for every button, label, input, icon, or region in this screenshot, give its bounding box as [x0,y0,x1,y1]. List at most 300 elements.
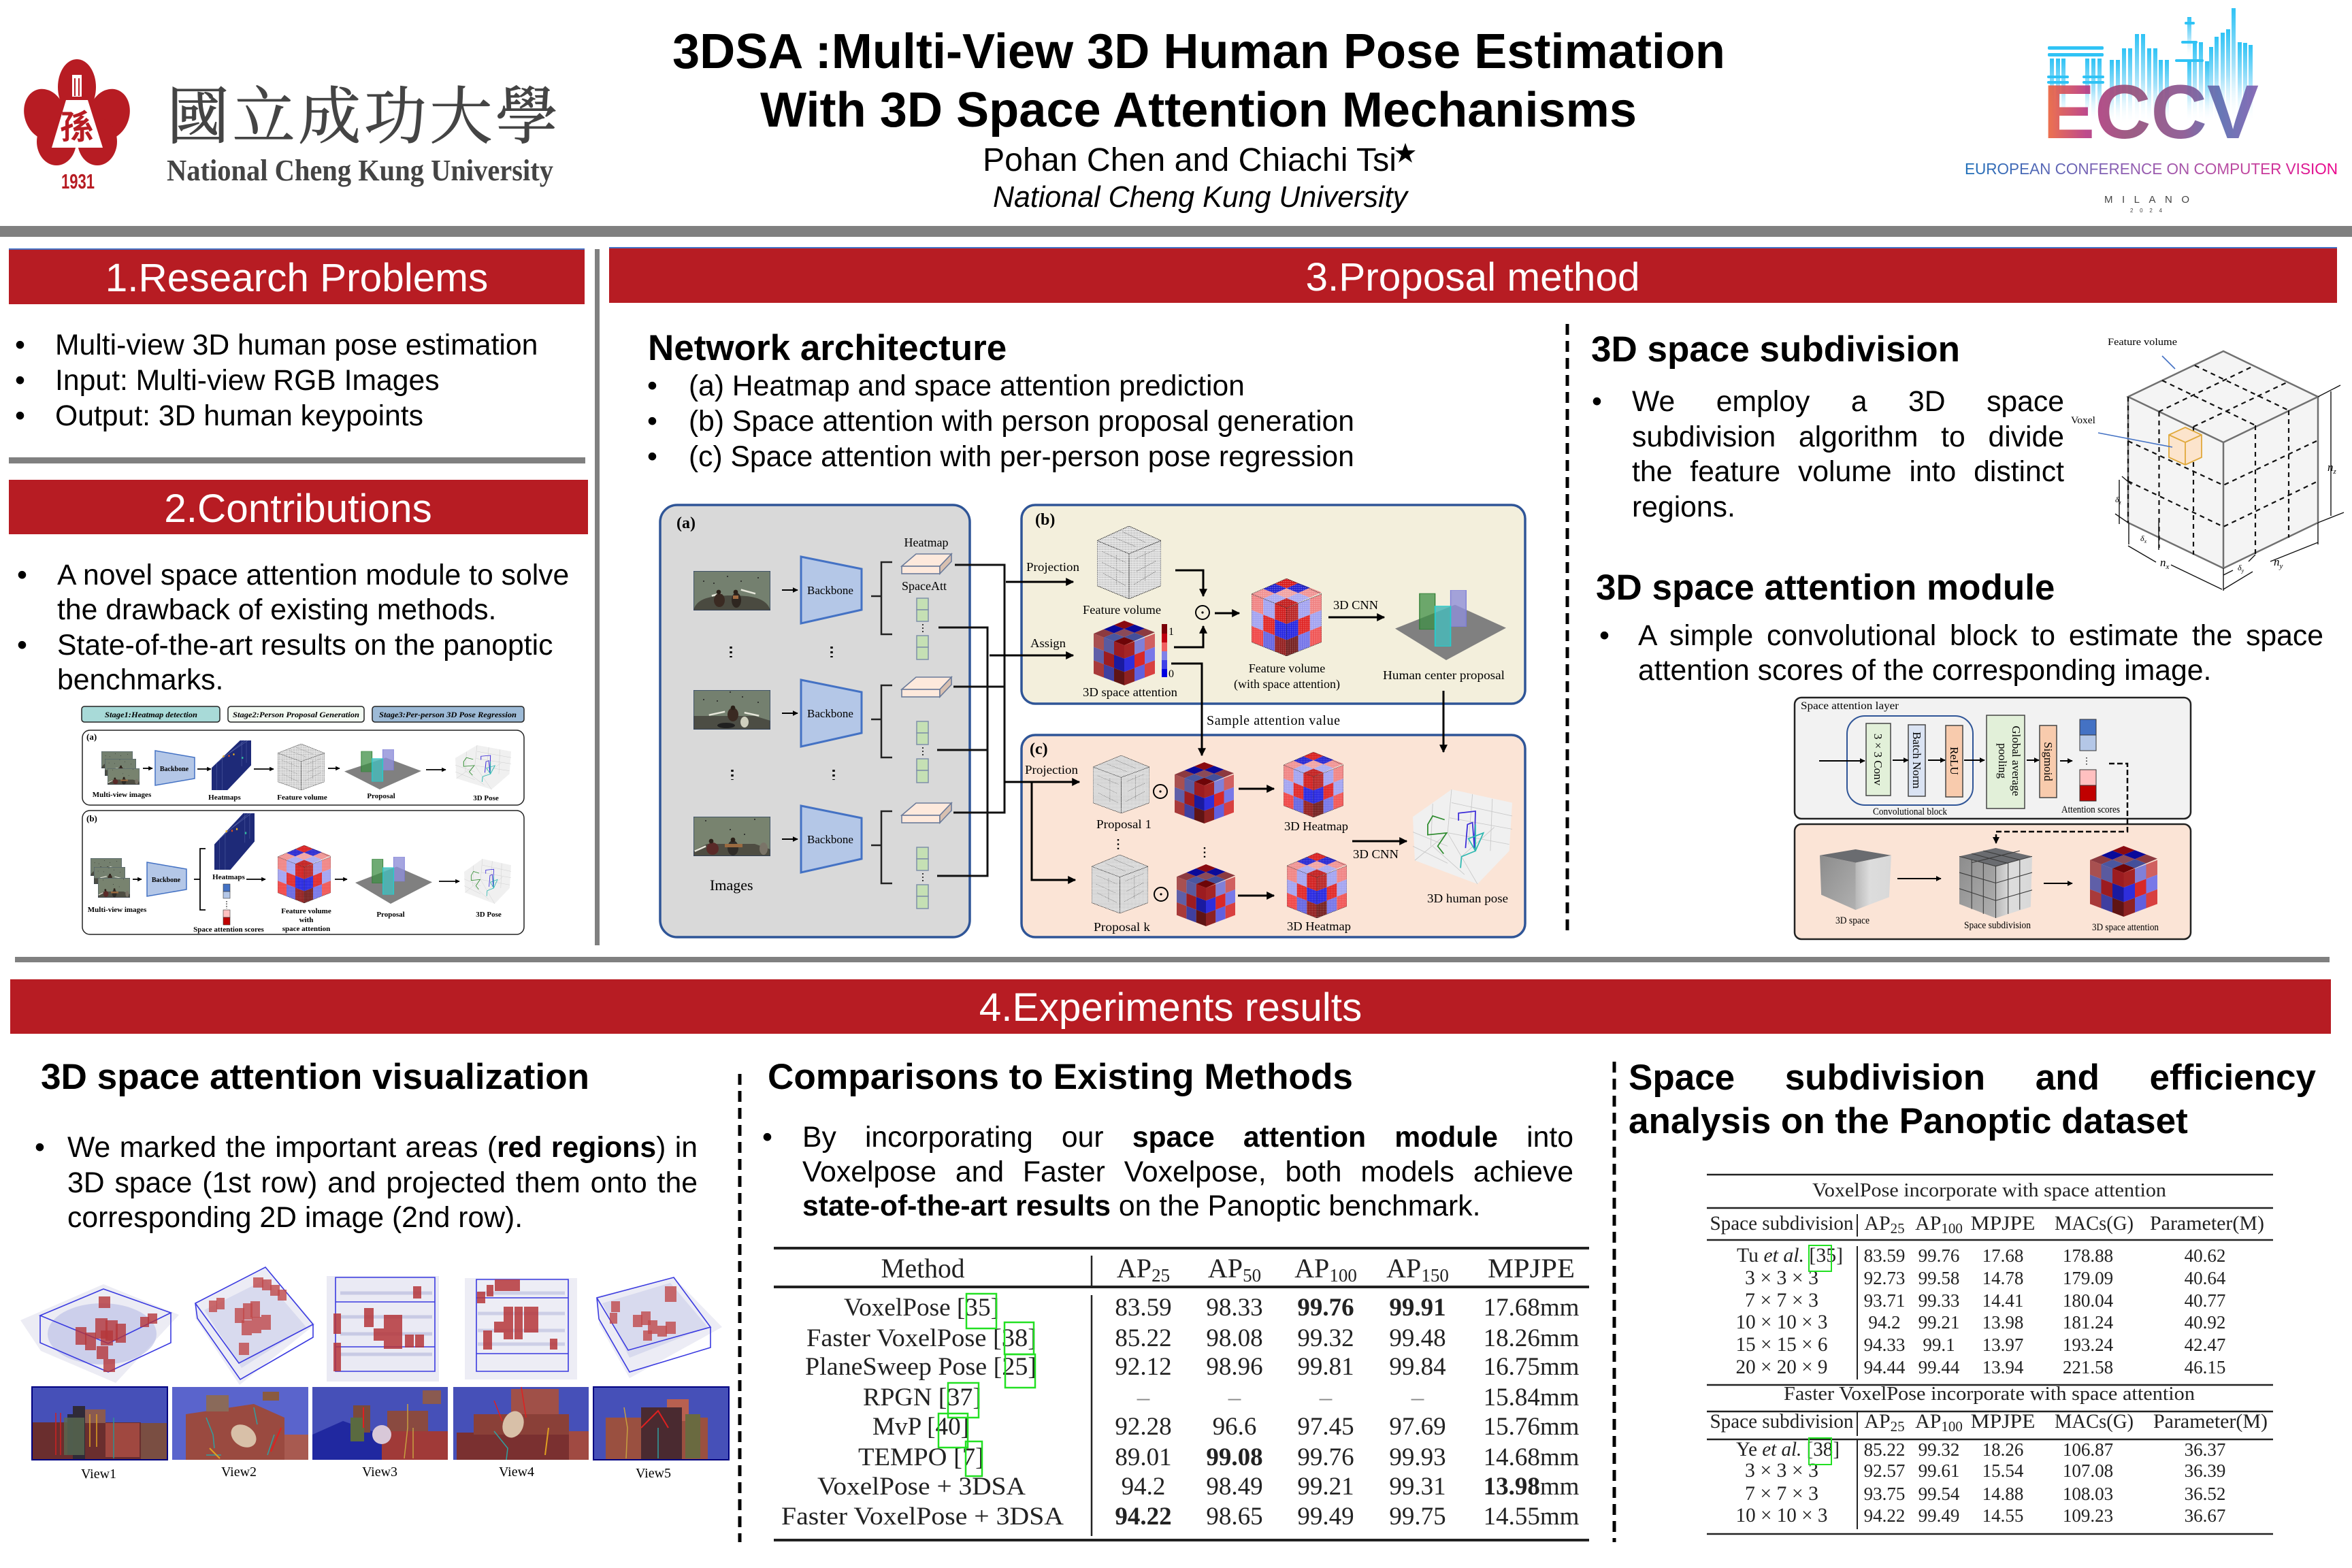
figure: projected attention views [32,1387,729,1460]
panel: space attention layer: 3 × 3 Conv [1872,734,1884,786]
table: space subdivision analysis: 14.55 [1982,1505,2023,1526]
text: • [35,1131,45,1164]
table: comparisons to existing methods: 18.26mm [1484,1324,1580,1352]
panel: row a: Feature volume [277,794,327,802]
table: comparisons to existing methods: 85.22 [1115,1324,1172,1352]
panel b: person proposal generation: Feature volume [1249,662,1325,675]
panel: row b: Multi-view images [88,906,147,914]
panel c: per-person pose regression: 3D Heatmap [1284,819,1348,833]
panel: network figure [660,505,1525,937]
panel: 3D space subdivision flow: Space subdivision [1964,920,2031,931]
text block: visualization: 3D space (1st row) and projected them onto the [67,1166,698,1199]
text block: contributions: State-of-the-art results on the panoptic [57,629,553,662]
table: space subdivision analysis: 99.54 [1918,1484,1960,1504]
text block: network architecture list: (a) Heatmap and space attention prediction [689,370,1245,402]
panel: row b: 3D Pose [476,911,502,919]
table: comparisons to existing methods: 99.32 [1297,1324,1354,1352]
table: space subdivision analysis: 7 × 7 × 3 [1745,1482,1818,1505]
arrows between panels [990,570,1443,896]
table: comparisons to existing methods: 99.21 [1297,1473,1354,1501]
table: space subdivision analysis: 36.67 [2185,1505,2225,1526]
text block: comparisons: By incorporating our space attention module into [802,1121,1573,1154]
text: • [15,329,25,361]
table: comparisons to existing methods: 15.84mm [1484,1384,1580,1411]
table: space subdivision analysis: 10 × 10 × 3 [1735,1504,1828,1526]
table: comparisons to existing methods: 99.81 [1297,1353,1354,1381]
view 2 [172,1387,308,1460]
table: space subdivision analysis: 221.58 [2063,1357,2113,1377]
title [672,24,1725,137]
text block: comparisons [762,1121,1573,1222]
table: space subdivision analysis: 3 × 3 × 3 [1745,1267,1818,1289]
table: space subdivision analysis: 107.08 [2063,1460,2113,1481]
header gray bar [0,226,2352,237]
table: space subdivision analysis: 3 × 3 × 3 [1745,1459,1818,1482]
figure: feature volume subdivision: δ [2115,495,2119,504]
text block: research problems: Input: Multi-view RGB Images [55,364,440,397]
table: comparisons to existing methods: 99.76 [1297,1294,1354,1322]
panel: row b: Feature volume [281,907,331,915]
figure: small pipeline comparison [82,706,524,934]
table: comparisons to existing methods: 99.48 [1389,1324,1446,1352]
table: comparisons to existing methods: 98.96 [1206,1353,1263,1381]
figure: feature volume subdivision [2071,337,2344,591]
table: space subdivision analysis: 99.21 [1918,1312,1959,1333]
dashed connector [1996,764,2127,843]
panel c: per-person pose regression: 3D Heatmap [1287,919,1351,933]
table: comparisons to existing methods: 98.65 [1206,1503,1263,1531]
table: comparisons to existing methods: PlaneSweep Pose [25] [805,1353,1036,1381]
table: space subdivision analysis: 100 [1941,1418,1963,1435]
table: space subdivision analysis: 18.26 [1982,1439,2023,1460]
panel: 3D space subdivision flow: 3D space attention [2092,922,2159,933]
table: comparisons to existing methods: Method [881,1253,965,1284]
panel: row b: (b) [86,813,97,823]
figure: feature volume subdivision: δ [2238,563,2242,572]
panel a: heatmap and space attention prediction: Heatmap [904,536,948,549]
table: space subdivision analysis: 40.77 [2185,1290,2225,1311]
table: space subdivision analysis: VoxelPose incorporate with space attention [1812,1179,2167,1201]
table: space subdivision analysis: 99.76 [1918,1245,1959,1266]
panel a: heatmap and space attention prediction: Images [710,877,753,894]
table: space subdivision analysis: 14.78 [1982,1268,2023,1288]
icon: NCKU flower emblem: 孫 [60,100,94,149]
table: space subdivision analysis: 14.41 [1982,1290,2023,1311]
text: • [1592,385,1602,418]
text block: contributions [17,559,569,696]
plot 4 [465,1278,577,1379]
panel a: heatmap and space attention prediction: SpaceAtt [902,579,947,593]
title: 3DSA :Multi-View 3D Human Pose Estimation [672,24,1725,79]
table: space subdivision analysis: AP [1915,1212,1941,1235]
panel a: heatmap and space attention prediction: Backbone [807,584,853,597]
panel: space attention layer: Attention scores [2061,804,2120,815]
icon: voxel [2169,427,2202,465]
logo: National Cheng Kung University [18,59,558,193]
table: space subdivision analysis: 109.23 [2063,1505,2113,1526]
table: space subdivision analysis: 99.49 [1918,1505,1959,1526]
table: space subdivision analysis: 180.04 [2063,1290,2114,1311]
panel: row a: Heatmaps [208,794,242,802]
table: comparisons to existing methods: VoxelPose + 3DSA [817,1473,1026,1501]
panel: row a: Proposal [367,792,395,800]
view 1 [32,1387,167,1460]
table: comparisons to existing methods: RPGN [37] [863,1384,981,1411]
table: space subdivision analysis: 14.88 [1982,1484,2023,1504]
table: space subdivision analysis: Parameter(M) [2150,1212,2264,1235]
table: comparisons to existing methods: Faster VoxelPose [38] [806,1324,1036,1352]
table: comparisons to existing methods: 99.75 [1389,1503,1446,1531]
panel: row b: Space attention scores [193,926,265,934]
panel: section 4 header: 4.Experiments results [979,985,1362,1030]
table: comparisons to existing methods: 25 [1152,1265,1170,1286]
panel: space attention layer: Global average [2010,725,2023,796]
text block: 3D space subdivision: regions. [1632,490,1735,523]
panel c: per-person pose regression: 3D CNN [1353,847,1399,861]
panel: section 3 header: 3.Proposal method [1305,255,1640,299]
panel: space attention layer: Batch Norm [1910,732,1923,789]
table: space subdivision analysis: 178.88 [2063,1245,2113,1266]
table: space subdivision analysis: AP [1864,1212,1891,1235]
stage labels: Stage3:Per-person 3D Pose Regression [379,710,517,719]
table: comparisons to existing methods: 99.76 [1297,1443,1354,1471]
panel a: heatmap and space attention prediction [660,505,1004,937]
table: comparisons to existing methods: 50 [1243,1265,1261,1286]
figure: feature volume subdivision: n [2328,461,2333,474]
heading: visualization: 3D space attention visualization [41,1057,589,1097]
panel: 3D space subdivision flow [1795,824,2191,939]
table: comparisons to existing methods: TEMPO [7] [858,1443,984,1471]
view labels: View1 [81,1467,116,1482]
view 3 [312,1387,448,1460]
table: space subdivision analysis: 7 × 7 × 3 [1745,1289,1818,1311]
table: comparisons to existing methods: MvP [40] [872,1413,969,1441]
table: space subdivision analysis: 181.24 [2063,1312,2114,1333]
table: comparisons to existing methods: AP [1117,1253,1152,1284]
icon: NCKU flower emblem [18,59,136,165]
text: • [17,559,27,591]
table: comparisons to existing methods [774,1248,1589,1540]
table: space subdivision analysis: 13.98 [1982,1312,2023,1333]
table: comparisons to existing methods: – [1228,1384,1241,1411]
table: space subdivision analysis: 94.44 [1864,1357,1906,1377]
stage labels [82,706,524,722]
panel b: person proposal generation: 3D CNN [1333,598,1378,612]
panel: row b: with [299,916,313,924]
text block: attention module: A simple convolutional block to estimate the space [1638,619,2323,652]
table: comparisons to existing methods: Faster VoxelPose + 3DSA [781,1503,1064,1531]
table: comparisons to existing methods: 99.93 [1389,1443,1446,1471]
text block: attention module: attention scores of the corresponding image. [1638,653,2211,686]
table: space subdivision analysis: 46.15 [2185,1357,2225,1377]
text block: contributions: A novel space attention module to solve [57,559,569,591]
table: comparisons to existing methods: 13.98mm [1484,1473,1580,1501]
table: comparisons to existing methods: – [1319,1384,1333,1411]
ECCV wordmark: ECCV [2043,69,2259,154]
figure: feature volume subdivision: z [2119,500,2122,506]
panel c: per-person pose regression: 3D human pose [1427,892,1508,905]
panel a: heatmap and space attention prediction: (a) [676,514,696,532]
panel: space attention layer: pooling [1996,743,2009,779]
figure: feature volume subdivision: y [2241,568,2244,574]
figure: feature volume subdivision: y [2278,562,2283,570]
table: space subdivision analysis: MPJPE [1971,1410,2035,1433]
table: space subdivision analysis: 25 [1891,1418,1905,1435]
table: comparisons to existing methods: 15.76mm [1484,1413,1580,1441]
table: space subdivision analysis: 93.71 [1864,1290,1905,1311]
panel: space attention layer: ReLU [1948,747,1961,775]
view labels: View3 [362,1465,397,1480]
affiliation: National Cheng Kung University [993,180,1409,214]
panel: row b: Heatmaps [212,873,246,881]
title: With 3D Space Attention Mechanisms [760,83,1637,137]
panel: row a: 3D Pose [473,794,499,802]
panel: space attention layer [1795,698,2191,819]
text block: contributions: the drawback of existing methods. [57,593,496,626]
table: comparisons to existing methods: 99.84 [1389,1353,1446,1381]
panel c: per-person pose regression: Proposal 1 [1096,817,1152,831]
table: space subdivision analysis: 108.03 [2063,1484,2113,1504]
table: space subdivision analysis [1707,1175,2273,1534]
table: space subdivision analysis: Ye et al. [38] [1736,1438,1840,1460]
panel: section 2 header: 2.Contributions [164,487,432,531]
text: • [15,364,25,397]
table: comparisons to existing methods: 92.28 [1115,1413,1172,1441]
table: comparisons to existing methods: – [1411,1384,1424,1411]
figure: feature volume subdivision: z [2333,468,2337,476]
table: space subdivision analysis: 93.75 [1864,1484,1905,1504]
heading: 3D space subdivision: 3D space subdivision [1591,329,1960,370]
text block: 3D space subdivision [1592,385,2064,523]
stage labels: Stage2:Person Proposal Generation [233,710,359,719]
text block: 3D space subdivision: subdivision algorithm to divide [1632,421,2064,453]
table: comparisons to existing methods: 98.33 [1206,1294,1263,1322]
view labels: View5 [636,1466,671,1481]
panel c: per-person pose regression: (c) [1030,740,1048,758]
stage labels: Stage1:Heatmap detection [105,710,197,719]
table: comparisons to existing methods: 98.49 [1206,1473,1263,1501]
table: comparisons to existing methods: 94.22 [1115,1503,1172,1531]
panel: row b: space attention [282,925,330,933]
table: space subdivision analysis: MACs(G) [2055,1410,2134,1433]
text block: research problems [15,329,538,432]
table: space subdivision analysis: 36.37 [2185,1439,2225,1460]
panel a: heatmap and space attention prediction: Backbone [807,833,853,846]
table: space subdivision analysis: 99.61 [1918,1460,1959,1481]
text: • [15,399,25,432]
panel c: per-person pose regression: Projection [1025,763,1078,777]
icon: author star [1395,143,1416,163]
table: comparisons to existing methods: 92.12 [1115,1353,1172,1381]
table: comparisons to existing methods: 96.6 [1213,1413,1256,1441]
table: space subdivision analysis: 36.39 [2185,1460,2225,1481]
text block: visualization [35,1131,698,1234]
text block: research problems: Output: 3D human keypoints [55,399,423,432]
table: comparisons to existing methods: – [1137,1384,1150,1411]
table: space subdivision analysis: 40.62 [2185,1245,2225,1266]
view 5 [593,1387,729,1460]
view labels [81,1465,671,1482]
text: • [17,629,27,662]
panel b: person proposal generation: Human center proposal [1383,668,1505,682]
plot 1 [20,1284,179,1383]
figure: feature volume subdivision: x [2144,538,2147,544]
table: space subdivision analysis: 10 × 10 × 3 [1735,1311,1828,1333]
figure: space attention layer [1795,698,2191,939]
text block: network architecture list: (c) Space attention with per-person pose regression [689,440,1354,473]
table: space subdivision analysis: 193.24 [2063,1335,2114,1355]
table: space subdivision analysis: Space subdivision [1710,1410,1854,1433]
table: space subdivision analysis: 99.32 [1918,1439,1959,1460]
panel: row b: Backbone [152,877,181,884]
university name in Chinese: 國立成功大學 [167,67,558,157]
table: space subdivision analysis: Tu et al. [35] [1737,1244,1843,1267]
table: space subdivision analysis: 94.2 [1868,1312,1901,1333]
panel b: person proposal generation: (with space attention) [1234,677,1340,691]
panel b: person proposal generation: Assign [1030,636,1066,650]
table: space subdivision analysis: 99.44 [1918,1357,1960,1377]
table: comparisons to existing methods: 97.45 [1297,1413,1354,1441]
table: comparisons to existing methods: 94.2 [1122,1473,1165,1501]
panel: section 1 header: 1.Research Problems [105,256,488,300]
table: space subdivision analysis: 42.47 [2185,1335,2225,1355]
view 4 [453,1387,589,1460]
panel b: person proposal generation: 1 [1169,626,1174,638]
view labels: View4 [499,1465,534,1480]
table: space subdivision analysis: AP [1915,1410,1941,1433]
table: space subdivision analysis: 83.59 [1864,1245,1905,1266]
logo: ECCV [1965,8,2338,214]
text: • [762,1121,772,1154]
panel: section 1 header [9,248,585,304]
panel: row a: Multi-view images [93,791,152,799]
figure: 3D attention plots [20,1267,722,1385]
panel: section 4 header [10,979,2331,1034]
panel: section 2 header [9,480,588,534]
table: space subdivision analysis: MACs(G) [2055,1212,2134,1235]
table: comparisons to existing methods: 16.75mm [1484,1353,1580,1381]
table: comparisons to existing methods: AP [1294,1253,1329,1284]
plot 2 [195,1267,315,1385]
table: space subdivision analysis: 25 [1891,1220,1905,1237]
text block: 3D space subdivision: We employ a 3D space [1632,385,2064,418]
panel c: per-person pose regression: Proposal k [1094,920,1150,934]
table: comparisons to existing methods: 14.68mm [1484,1443,1580,1471]
text block: visualization: We marked the important areas (red regions) in [67,1131,698,1164]
table: space subdivision analysis: Space subdivision [1710,1212,1854,1235]
table: space subdivision analysis: 99.1 [1923,1335,1955,1355]
panel: 3D space subdivision flow: 3D space [1835,915,1869,926]
table: space subdivision analysis: 106.87 [2063,1439,2113,1460]
panel b: person proposal generation: (b) [1035,511,1055,529]
heading: network architecture: Network architecture [648,328,1007,368]
year: 2024 [2130,208,2163,214]
table: comparisons to existing methods: 99.91 [1389,1294,1446,1322]
table: space subdivision analysis: 13.97 [1982,1335,2023,1355]
table: space subdivision analysis: 92.73 [1864,1268,1905,1288]
text block: network architecture list: (b) Space attention with person proposal generation [689,405,1354,438]
emblem year: 1931 [61,169,95,193]
figure: feature volume subdivision: x [2166,563,2170,571]
text block: comparisons: state-of-the-art results on the Panoptic benchmark. [802,1190,1480,1222]
table: space subdivision analysis: Parameter(M) [2153,1410,2268,1433]
panel: row b: Proposal [376,911,405,919]
table: space subdivision analysis: 92.57 [1864,1460,1905,1481]
panel b: person proposal generation: 0 [1169,668,1174,680]
label: sample attention value: Sample attention value [1207,713,1340,728]
panel b: person proposal generation: Projection [1026,560,1079,574]
table: comparisons to existing methods: 99.08 [1206,1443,1263,1471]
authors: Pohan Chen and Chiachi Tsi [983,142,1396,178]
text: • [647,370,657,402]
table: space subdivision analysis: 36.52 [2185,1484,2225,1504]
table: comparisons to existing methods: 97.69 [1389,1413,1446,1441]
text: • [1599,619,1610,652]
table: space subdivision analysis: 94.22 [1864,1505,1905,1526]
panel: space attention layer: Space attention layer [1801,700,1899,712]
panel: space attention layer: Convolutional block [1873,806,1947,817]
panel c: per-person pose regression [1022,735,1525,937]
table: space subdivision analysis: MPJPE [1971,1212,2035,1235]
panel: space attention layer: Sigmoid [2042,742,2055,781]
heading: space subdivision analysis: Space subdivision and efficiency [1629,1058,2316,1098]
table: space subdivision analysis: 40.64 [2185,1268,2226,1288]
view labels: View2 [221,1465,257,1480]
panel b: person proposal generation: 3D space attention [1083,685,1177,699]
table: space subdivision analysis: 99.58 [1918,1268,1959,1288]
table: comparisons to existing methods: 89.01 [1115,1443,1172,1471]
heading: space subdivision analysis [1629,1058,2316,1141]
table: space subdivision analysis: 17.68 [1982,1245,2023,1266]
table: comparisons to existing methods: 98.08 [1206,1324,1263,1352]
table: comparisons to existing methods: VoxelPose [35] [844,1294,999,1322]
text block: network architecture list [647,370,1354,473]
table: comparisons to existing methods: 99.31 [1389,1473,1446,1501]
skyline bars [2050,8,2253,125]
table: space subdivision analysis: AP [1864,1410,1891,1433]
location: MILANO [2104,194,2189,206]
figure: feature volume subdivision: n [2160,556,2166,569]
conference name: EUROPEAN CONFERENCE ON COMPUTER VISION [1965,160,2338,178]
table: comparisons to existing methods: 17.68mm [1484,1294,1580,1322]
text: • [647,405,657,438]
table: space subdivision analysis: 13.94 [1982,1357,2024,1377]
heading: 3D space attention module: 3D space attention module [1596,568,2055,608]
panel: section 3 header [609,247,2337,303]
table: comparisons to existing methods: MPJPE [1488,1253,1575,1284]
panel: row a [82,730,524,805]
table: space subdivision analysis: 40.92 [2185,1312,2225,1333]
text: • [647,440,657,473]
figure: feature volume subdivision: Voxel [2071,415,2095,426]
table: comparisons to existing methods: 83.59 [1115,1294,1172,1322]
panel: row b [82,811,524,934]
table: comparisons to existing methods: 150 [1421,1265,1449,1286]
heading: space subdivision analysis: analysis on the Panoptic dataset [1629,1101,2188,1141]
text block: attention module [1599,619,2323,686]
table: space subdivision analysis: 94.33 [1864,1335,1905,1355]
table: space subdivision analysis: 15 × 15 × 6 [1735,1333,1828,1356]
text block: visualization: corresponding 2D image (2nd row). [67,1201,523,1234]
figure: feature volume subdivision: Feature volume [2108,337,2177,348]
university name in English: National Cheng Kung University [167,154,553,187]
table: space subdivision analysis: 99.33 [1918,1290,1959,1311]
panel b: person proposal generation [1022,505,1525,704]
table: comparisons to existing methods: AP [1386,1253,1421,1284]
heading: comparisons: Comparisons to Existing Methods [768,1057,1353,1097]
table: comparisons to existing methods: AP [1208,1253,1243,1284]
table: comparisons to existing methods: 99.49 [1297,1503,1354,1531]
